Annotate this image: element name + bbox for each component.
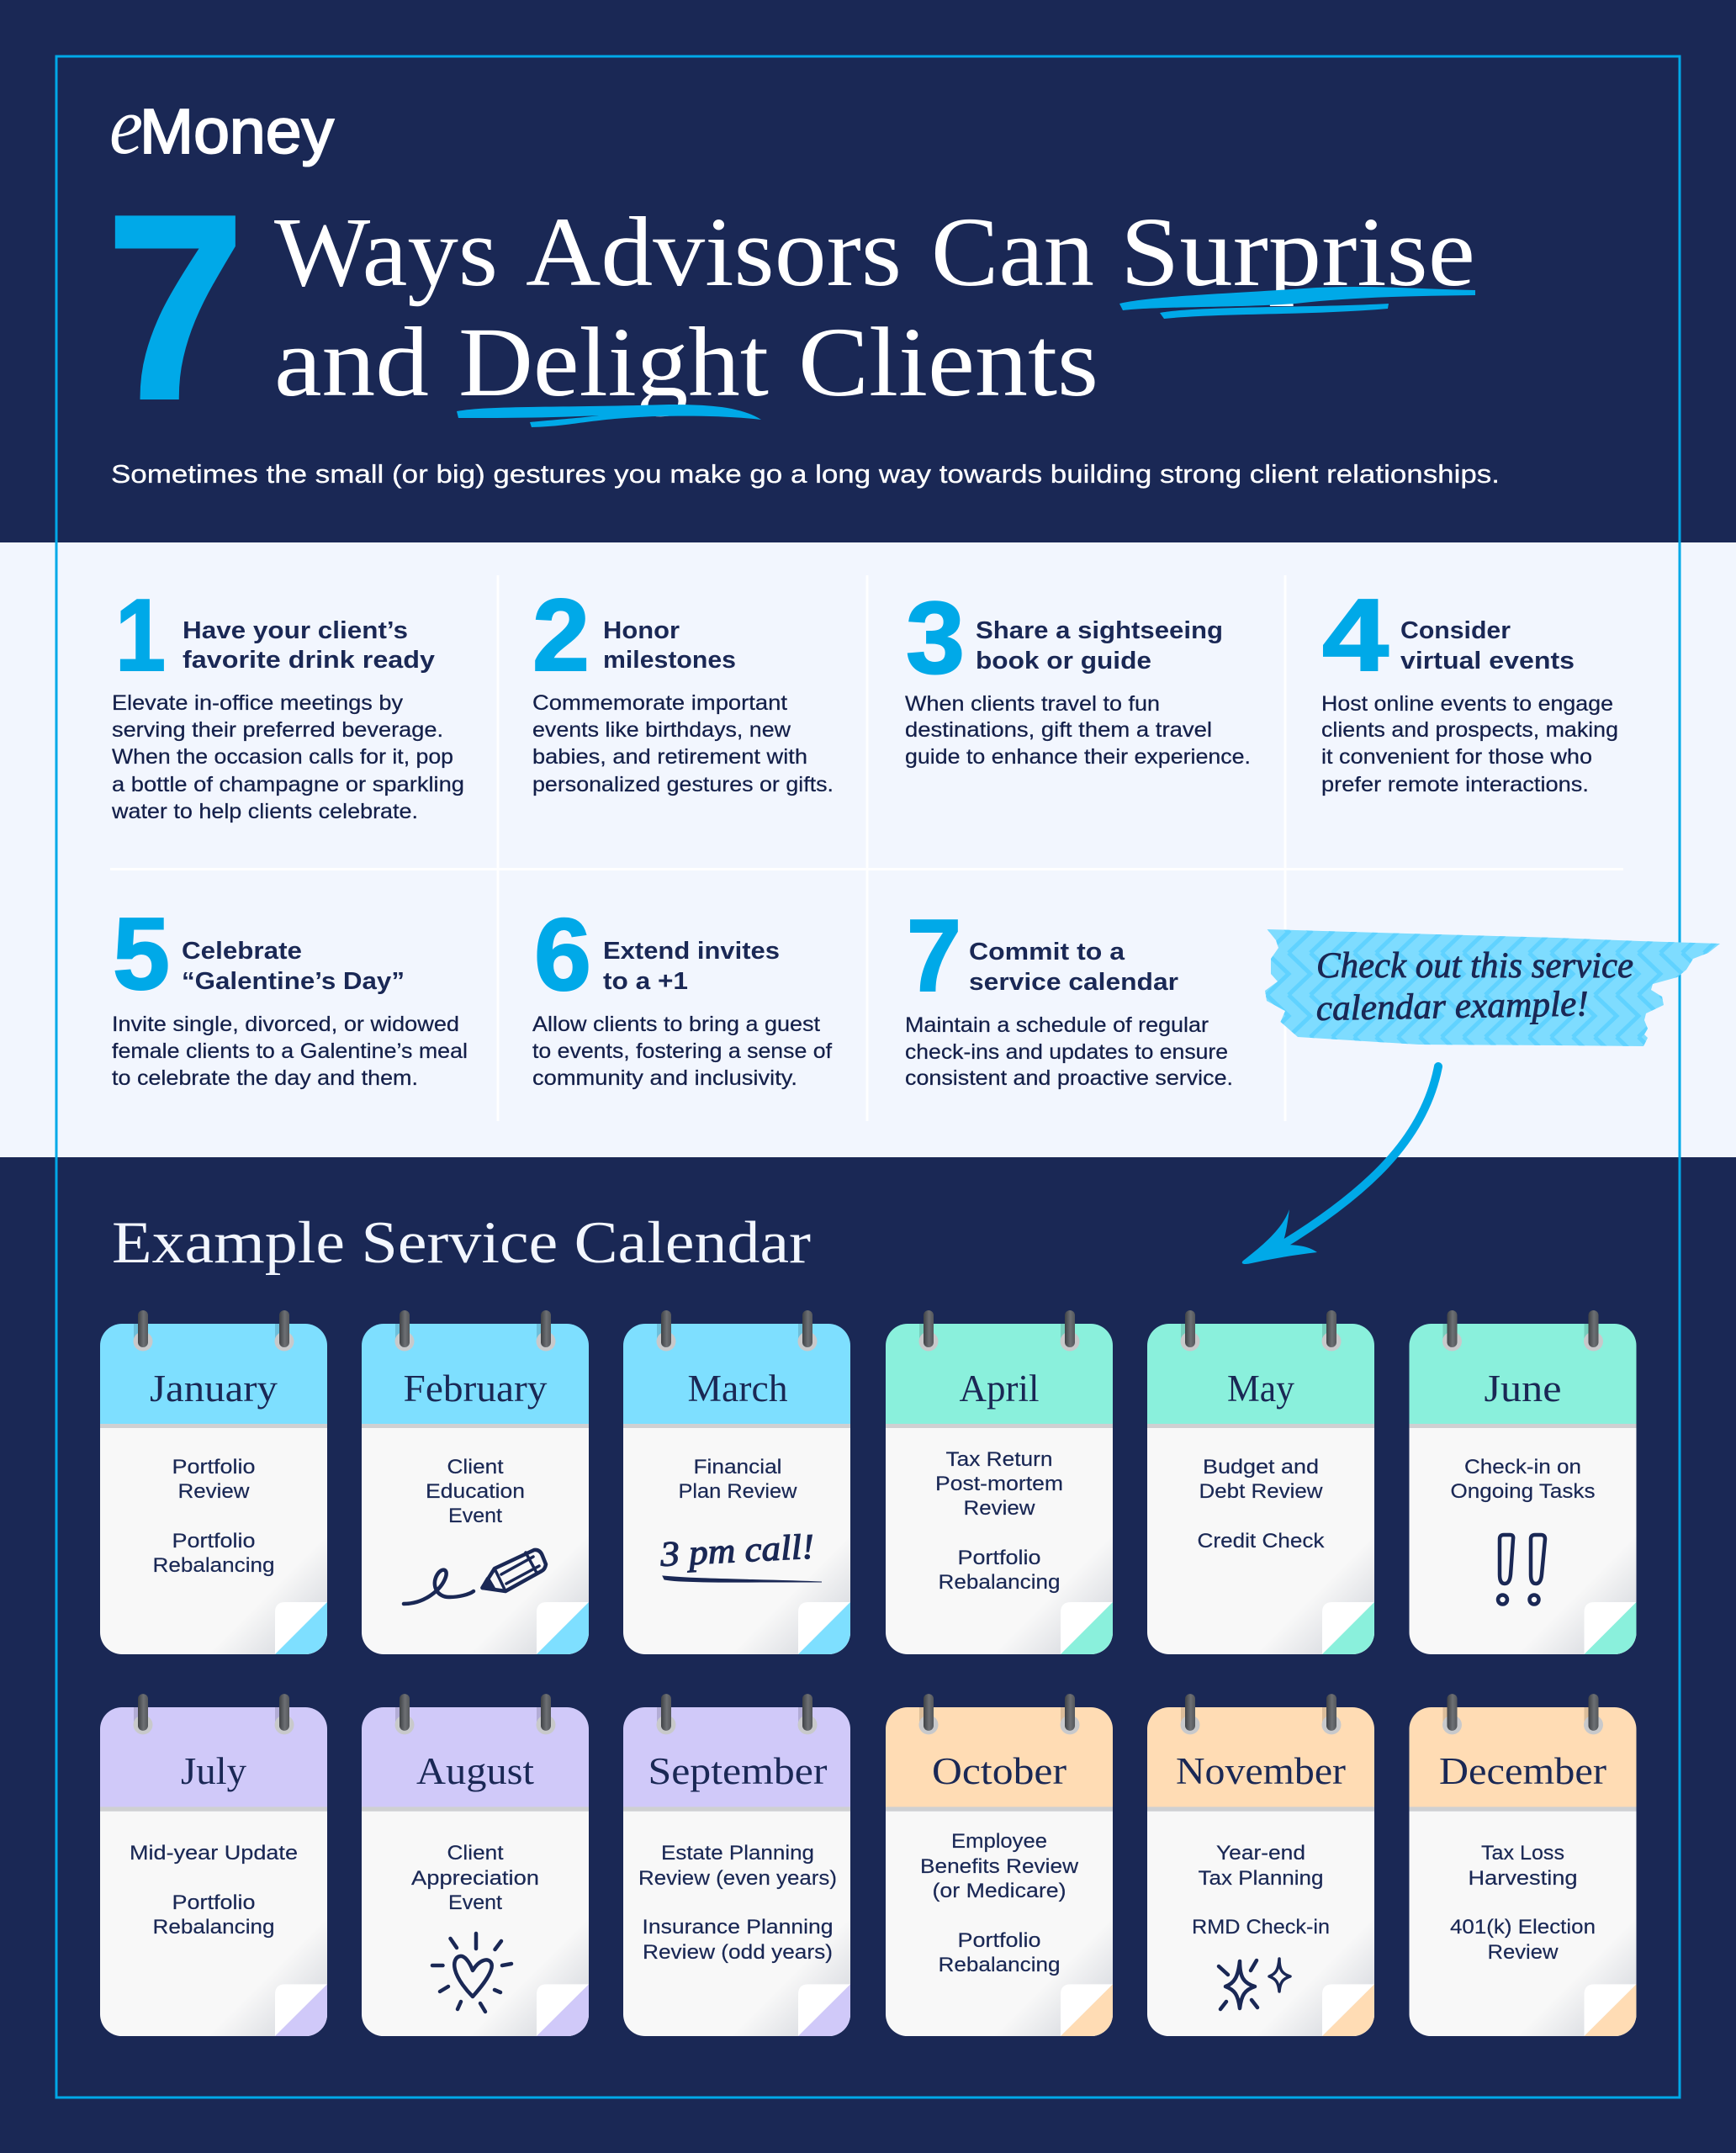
heading: book or guide (976, 648, 1151, 674)
month: February (404, 1367, 548, 1410)
tasks (1450, 1842, 1596, 1964)
month: March (688, 1367, 787, 1410)
tasks: Portfolio (957, 1547, 1041, 1569)
heading (603, 617, 736, 674)
tasks: Rebalancing (939, 1954, 1060, 1976)
tasks (1192, 1842, 1330, 1939)
tasks: Portfolio (172, 1891, 256, 1914)
tasks (1198, 1456, 1326, 1553)
body: Elevate in-office meetings by (112, 691, 404, 715)
heading: Celebrate (182, 938, 302, 965)
tasks: Rebalancing (939, 1571, 1060, 1594)
card: September (623, 1694, 850, 2036)
title line 2: Clients (798, 307, 1098, 417)
body: check-ins and updates to ensure (905, 1040, 1228, 1064)
tip 3 (905, 580, 1251, 769)
tasks: Review (1487, 1941, 1559, 1964)
tasks: Insurance Planning (643, 1916, 833, 1939)
logo: eMoney: e (109, 81, 143, 171)
body: consistent and proactive service. (905, 1066, 1233, 1090)
number 2: 2 (532, 578, 590, 692)
tip 5 (112, 897, 468, 1090)
icon: double exclamation doodle (1498, 1535, 1545, 1605)
card: May (1147, 1310, 1374, 1654)
card: June (1410, 1310, 1637, 1654)
tasks: 401(k) Election (1450, 1916, 1596, 1939)
heading: Honor (603, 617, 680, 644)
body (532, 1013, 832, 1090)
month: April (959, 1367, 1040, 1410)
tasks: Ongoing Tasks (1450, 1480, 1595, 1503)
callout text: Check out this service (1316, 946, 1633, 986)
heading (603, 938, 780, 995)
body: community and inclusivity. (532, 1066, 797, 1090)
card: August (362, 1694, 589, 2036)
title line 1: Surprise (1120, 197, 1475, 307)
tasks: Benefits Review (920, 1855, 1079, 1878)
calendar page (1410, 1694, 1637, 2036)
tasks (411, 1842, 539, 1914)
body (532, 691, 834, 796)
tip 7 (905, 898, 1233, 1090)
tasks: Tax Loss (1481, 1842, 1564, 1865)
tasks: Education (426, 1480, 525, 1503)
calendar page (362, 1310, 589, 1654)
title line 2 (274, 307, 1098, 417)
body: serving their preferred beverage. (112, 718, 443, 742)
body: destinations, gift them a travel (905, 718, 1212, 742)
callout text: calendar example! (1315, 984, 1589, 1029)
card: December (1410, 1694, 1637, 2036)
logo: eMoney: Money (140, 96, 334, 167)
tape shape (1265, 929, 1720, 1046)
heading: Example Service Calendar: Example Service Calendar (112, 1210, 811, 1276)
month: November (1176, 1750, 1346, 1792)
calendar page (886, 1310, 1113, 1654)
calendar page (623, 1310, 850, 1654)
card: July (100, 1694, 327, 2036)
card: April (886, 1310, 1113, 1654)
heading: virtual events (1400, 648, 1575, 674)
tasks: Year-end (1216, 1842, 1305, 1865)
tasks: Credit Check (1198, 1530, 1326, 1553)
body: When the occasion calls for it, pop (112, 745, 453, 769)
logo: eMoney (109, 81, 334, 171)
tasks: Event (448, 1505, 502, 1527)
underline: Delight (457, 405, 761, 427)
tasks: Employee (951, 1830, 1047, 1853)
month: January (150, 1367, 278, 1410)
card: October (886, 1694, 1113, 2036)
number 4: 4 (1322, 578, 1389, 692)
tasks (1450, 1456, 1595, 1503)
tasks: Financial (693, 1456, 782, 1479)
callout text (1315, 946, 1633, 1029)
month: June (1484, 1367, 1561, 1410)
body: to events, fostering a sense of (532, 1039, 832, 1063)
heading: Share a sightseeing (976, 617, 1223, 644)
heading (1400, 617, 1575, 674)
body: it convenient for those who (1321, 745, 1592, 769)
tasks: Review (odd years) (643, 1941, 833, 1964)
body: clients and prospects, making (1321, 718, 1618, 742)
title line 1: Can (931, 197, 1094, 307)
tasks (130, 1842, 298, 1939)
title line 2: and (274, 307, 429, 417)
tasks: Rebalancing (153, 1916, 274, 1939)
tasks: Mid-year Update (130, 1842, 298, 1865)
light band behind tips (0, 542, 1736, 1157)
tasks (153, 1456, 274, 1577)
callout: washi tape note (1265, 929, 1720, 1046)
body: When clients travel to fun (905, 692, 1160, 716)
tasks: Review (even years) (638, 1867, 837, 1890)
tasks: Post-mortem (935, 1473, 1063, 1495)
month: December (1439, 1750, 1606, 1792)
tasks: Estate Planning (661, 1842, 814, 1865)
tasks: Budget and (1203, 1456, 1319, 1479)
tasks (678, 1456, 797, 1503)
tasks: Rebalancing (153, 1554, 274, 1577)
month: October (932, 1750, 1066, 1792)
heading: to a +1 (603, 968, 688, 995)
body (1321, 692, 1618, 796)
body (905, 1013, 1233, 1090)
arrow: callout to calendar (1242, 1066, 1438, 1264)
calendar page (100, 1310, 327, 1654)
body: a bottle of champagne or sparkling (112, 773, 464, 796)
tasks: Portfolio (172, 1456, 256, 1479)
heading: Extend invites (603, 938, 780, 965)
heading: “Galentine’s Day” (182, 968, 405, 995)
tip 2 (532, 578, 834, 796)
tasks: Tax Planning (1198, 1867, 1324, 1890)
body (112, 1013, 468, 1090)
calendar page (623, 1694, 850, 2036)
card: March (623, 1310, 850, 1654)
tasks (920, 1830, 1079, 1976)
underline: Surprise (1119, 287, 1475, 319)
heading: Have your client’s (183, 617, 408, 644)
body: Host online events to engage (1321, 692, 1613, 716)
calendar page (1410, 1310, 1637, 1654)
calendar page (1147, 1310, 1374, 1654)
tasks: Check-in on (1464, 1456, 1581, 1479)
icon: sparkles (1219, 1959, 1290, 2009)
tasks: Harvesting (1469, 1867, 1578, 1890)
number 7: 7 (907, 898, 961, 1013)
tasks: Portfolio (957, 1929, 1041, 1952)
body: female clients to a Galentine’s meal (112, 1039, 468, 1063)
heading: Consider (1400, 617, 1511, 644)
heading: favorite drink ready (183, 647, 435, 674)
body: water to help clients celebrate. (111, 800, 418, 823)
month: July (181, 1750, 247, 1792)
card: January (100, 1310, 327, 1654)
big number 7: 7 (106, 161, 245, 454)
body: Commemorate important (532, 691, 787, 715)
title line 2: Delight (458, 307, 769, 417)
title line 1 (274, 197, 1475, 307)
heading (182, 938, 405, 995)
tasks (935, 1448, 1063, 1594)
heading (976, 617, 1223, 674)
tasks: Plan Review (678, 1480, 797, 1503)
tasks: Client (447, 1842, 504, 1865)
number 1: 1 (115, 578, 166, 692)
handwritten note: 3 pm call! (659, 1527, 815, 1574)
tasks: Event (448, 1891, 502, 1914)
month: September (648, 1750, 828, 1792)
title line 1: Advisors (526, 197, 902, 307)
heading (183, 617, 435, 674)
heading: Commit to a (969, 939, 1125, 965)
body: prefer remote interactions. (1321, 773, 1589, 796)
tasks: Review (178, 1480, 250, 1503)
icon: pencil doodle (404, 1550, 546, 1604)
body: to celebrate the day and them. (112, 1066, 418, 1090)
card: November (1147, 1694, 1374, 2036)
body: Maintain a schedule of regular (905, 1013, 1209, 1037)
tasks (426, 1456, 525, 1527)
tasks (638, 1842, 837, 1964)
subtitle: Sometimes the small (or big) gestures you make go a long way towards building strong client relationships. (111, 459, 1500, 489)
tasks: (or Medicare) (932, 1880, 1066, 1902)
calendar page (1147, 1694, 1374, 2036)
number 5: 5 (113, 897, 170, 1011)
calendar page (100, 1694, 327, 2036)
month: May (1227, 1367, 1294, 1410)
number 6: 6 (534, 897, 591, 1012)
body: babies, and retirement with (532, 745, 807, 769)
tip 6 (532, 897, 832, 1090)
number 3: 3 (906, 580, 965, 695)
tasks: Appreciation (411, 1867, 539, 1890)
title line 1: Ways (274, 197, 498, 307)
tasks: Review (964, 1497, 1035, 1520)
icon: heart with rays (432, 1933, 511, 2012)
body (905, 692, 1251, 769)
body: Allow clients to bring a guest (532, 1013, 820, 1036)
body: events like birthdays, new (532, 718, 791, 742)
heading: service calendar (969, 969, 1178, 996)
card: February (362, 1310, 589, 1654)
month: August (416, 1750, 535, 1792)
body (111, 691, 464, 823)
heading (969, 939, 1178, 996)
tasks: Tax Return (945, 1448, 1053, 1471)
grid dividers (110, 575, 1623, 1121)
tasks: Client (447, 1456, 504, 1479)
body: Invite single, divorced, or widowed (112, 1013, 459, 1036)
calendar page (362, 1694, 589, 2036)
tasks: RMD Check-in (1192, 1916, 1330, 1939)
calendar page (886, 1694, 1113, 2036)
tasks: Portfolio (172, 1530, 256, 1553)
body: personalized gestures or gifts. (532, 773, 834, 796)
tasks: Debt Review (1199, 1480, 1323, 1503)
tip 1 (111, 578, 464, 823)
title block (106, 161, 1475, 454)
body: guide to enhance their experience. (905, 745, 1251, 769)
tip 4 (1321, 578, 1618, 796)
heading: milestones (603, 647, 736, 674)
